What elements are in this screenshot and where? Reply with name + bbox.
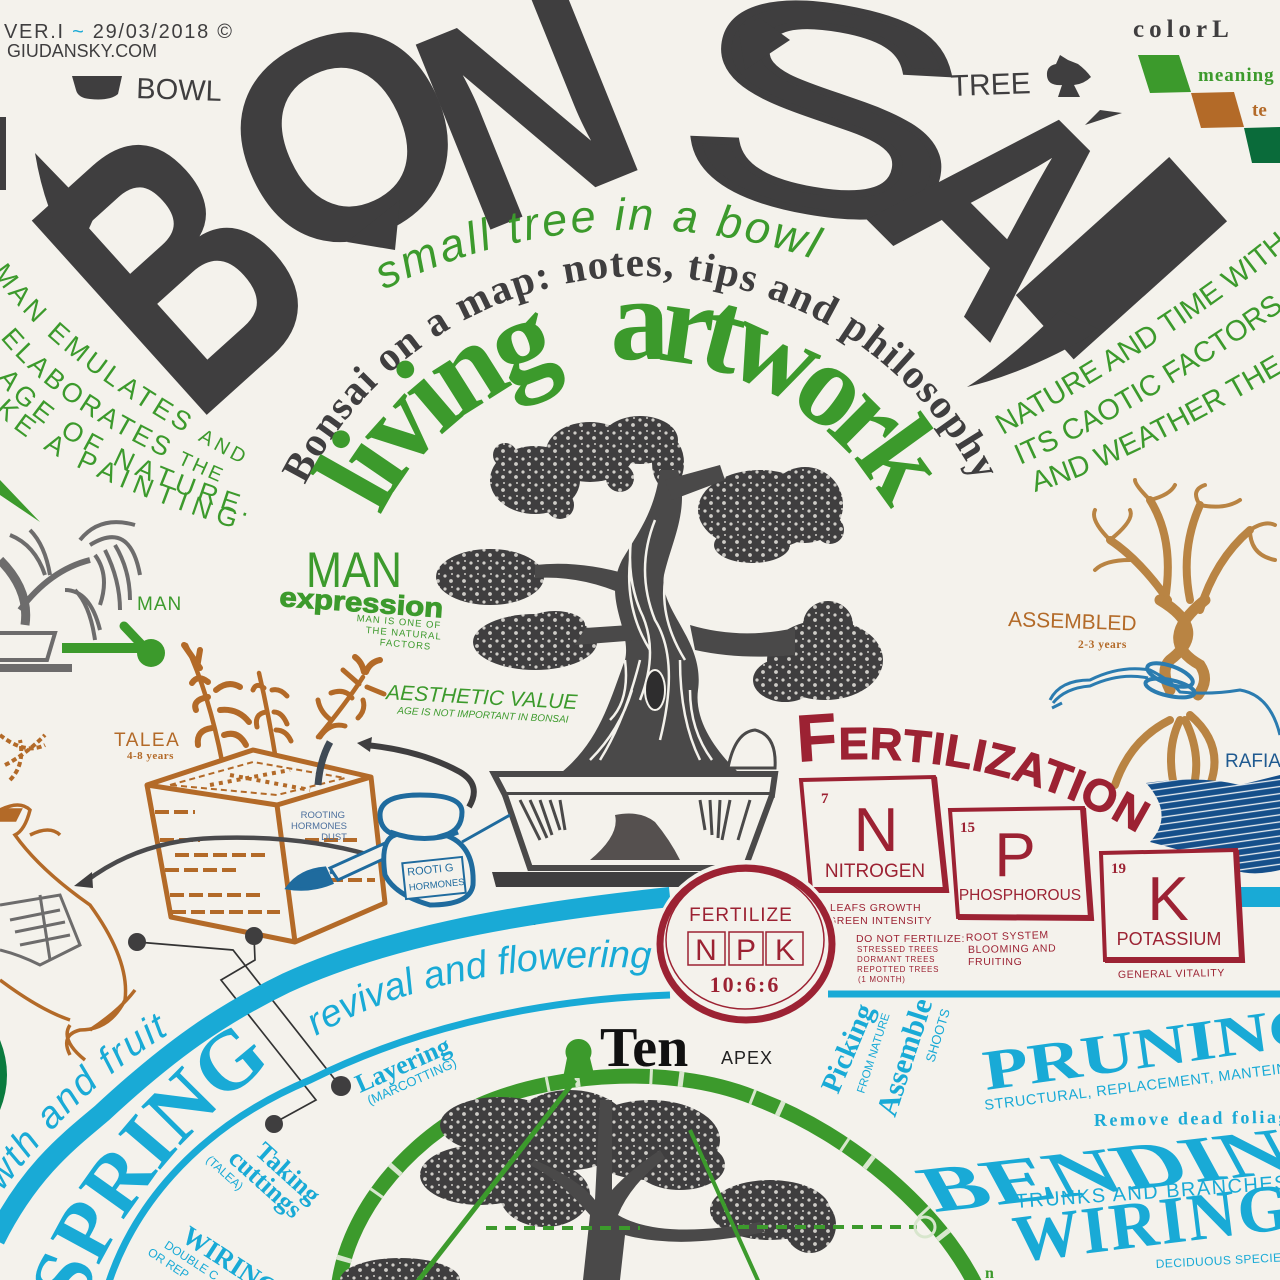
NPK tiles [801, 777, 1242, 960]
fertilize stamp: 10:6:6 [710, 972, 780, 997]
tile: potassium: POTASSIUM [1117, 929, 1221, 949]
color legend: meaning [1198, 65, 1275, 86]
icon: tree [1047, 55, 1091, 97]
green guide lines [415, 1080, 935, 1280]
hand text: revival and flowering: revival and flowering [310, 940, 652, 1036]
tile: nitrogen: NITROGEN [825, 861, 925, 882]
technique: layering: Layering [351, 1031, 455, 1098]
fertilization heading: FERTILIZATION [798, 713, 1151, 832]
connector lines [128, 919, 537, 1133]
text: aesthetic value: AESTHETIC VALUE [384, 681, 579, 714]
inner green ring [338, 1076, 978, 1280]
main bonsai tree [436, 416, 883, 887]
version note: GIUDANSKY.COM [7, 41, 157, 61]
tile: potassium [1101, 850, 1242, 960]
text: man expression: THE NATURAL [365, 625, 442, 643]
green edge tick [0, 480, 40, 522]
fertilizer notes: FRUITING [968, 956, 1022, 968]
trunk [562, 470, 738, 772]
inner foliage [340, 1090, 836, 1280]
green pin marker [62, 626, 165, 667]
left bag of roots [0, 735, 135, 1060]
raffia tie [1050, 658, 1280, 735]
fertilizer notes: DORMANT TREES [857, 955, 935, 964]
technique: pruning [979, 992, 1280, 1130]
color legend [1133, 16, 1280, 163]
assembled tree [1094, 480, 1275, 790]
fertilize stamp: N [695, 934, 717, 967]
arrow: hormones to cutting [365, 745, 474, 807]
pot [492, 730, 775, 887]
technique: picking: Assemble [870, 994, 939, 1120]
fertilizer notes: BLOOMING AND [968, 942, 1056, 956]
arrowhead: bag [74, 872, 93, 888]
fertilize stamp: FERTILIZE [689, 905, 793, 926]
technique: taking cuttings: (TALEA) [203, 1153, 246, 1193]
tile: nitrogen: N [854, 796, 898, 865]
technique: picking: Picking [815, 999, 881, 1098]
technique: picking: FROM NATURE [855, 1012, 893, 1095]
talea cutting plants [184, 645, 384, 783]
fertilizer notes: REPOTTED TREES [857, 965, 939, 974]
text: man expression: MAN IS ONE OF [356, 613, 442, 632]
rooting hormones jar: ROOTI G [407, 862, 454, 879]
version note: VER.I ~ 29/03/2018 © [4, 21, 232, 43]
tile: potassium: 19 [1111, 861, 1126, 877]
technique: bending: BENDING [905, 1107, 1280, 1226]
ring top pin [563, 1039, 595, 1078]
green edge marks [0, 1040, 7, 1110]
technique: layering: (MARCOTTING) [365, 1055, 459, 1108]
technique: pruning: PRUNING [979, 992, 1280, 1103]
inner tree [340, 1090, 836, 1280]
book in bag [0, 895, 80, 965]
text: man expression: expression [279, 582, 444, 623]
technique: taking cuttings [203, 1116, 326, 1235]
brush [287, 815, 510, 889]
label: talea: 4-8 years [127, 750, 174, 762]
label: assembled: ASSEMBLED [1008, 608, 1137, 635]
technique: picking: SHOOTS [923, 1007, 953, 1064]
arc heading: living artwork: living artwork [310, 304, 934, 514]
fertilizer notes: DO NOT FERTILIZE: [856, 933, 965, 945]
small gray tree, top left [0, 522, 140, 668]
text: aesthetic value: AGE IS NOT IMPORTANT IN BONSAI [396, 706, 569, 726]
text: man expression: MAN [306, 542, 402, 598]
color legend: colorL [1133, 16, 1234, 43]
label: rooting dust: HORMONES [291, 821, 347, 832]
tile: potassium: K [1147, 865, 1189, 934]
fertilize stamp: P [736, 934, 756, 967]
fertilize stamp [654, 860, 838, 1028]
text: man expression: FACTORS [379, 637, 432, 653]
label: apex: APEX [721, 1048, 773, 1068]
jar [380, 795, 473, 905]
rooting hormones jar: HORMONES [408, 877, 465, 894]
fertilizer notes: (1 MONTH) [858, 975, 906, 984]
label: bowl: BOWL [136, 73, 222, 108]
text: man expression [279, 542, 444, 654]
tile: nitrogen: 7 [821, 791, 829, 807]
tile: phosphorous: 15 [960, 820, 975, 836]
label: tree: TREE [950, 67, 1031, 103]
fertilizer notes: ROOT SYSTEM [966, 929, 1049, 944]
label: rooting dust: DUST [321, 832, 347, 843]
label: talea [114, 730, 180, 762]
text: man emulates nature: AGE OF NATURE. [0, 372, 246, 516]
title: BON SAI brush letters: A [817, 24, 1186, 393]
tile: nitrogen [801, 777, 946, 890]
talea box [147, 750, 385, 942]
arrow: jar to bag [85, 838, 370, 882]
branches [535, 465, 795, 657]
tile: phosphorous: PHOSPHOROUS [959, 887, 1081, 904]
fertilizer notes: STRESSED TREES [857, 945, 939, 954]
color legend: te [1252, 100, 1267, 121]
arrowhead: hormones [357, 737, 372, 752]
icon: bowl [72, 76, 122, 99]
arc heading: small tree in a bowl: small tree in a bowl [378, 197, 825, 288]
rooting hormones jar [287, 795, 510, 905]
label: rooting dust [291, 810, 347, 843]
label: Ten: Ten [600, 1017, 688, 1079]
label: rafia: RAFIA [1225, 751, 1280, 772]
tile: phosphorous: P [994, 821, 1036, 890]
inner trunk [530, 1100, 765, 1280]
fertilizer notes: GREEN INTENSITY [828, 915, 932, 927]
foliage clusters [436, 416, 883, 702]
trunk grain [590, 500, 712, 760]
small green label: man: MAN [137, 594, 182, 615]
tile: phosphorous [950, 808, 1091, 918]
technique: wiring small [145, 1209, 284, 1280]
arc heading: Bonsai on a map: Bonsai on a map: notes, tips and philosophy [282, 254, 994, 484]
title: BON SAI brush letters [0, 0, 1280, 486]
text: man emulates nature: ELABORATES THE [2, 328, 224, 482]
label: assembled: 2-3 years [1078, 639, 1127, 651]
label: rooting dust: ROOTING [301, 810, 345, 821]
technique: taking cuttings: Taking [250, 1136, 326, 1209]
fertilize stamp: K [775, 934, 795, 967]
label: talea: TALEA [114, 730, 180, 751]
version note [4, 21, 232, 61]
technique: picking [815, 994, 953, 1120]
label: assembled [1008, 608, 1137, 651]
technique: taking cuttings: cuttings [223, 1143, 308, 1224]
tree label [950, 55, 1091, 103]
fertilizer notes [828, 902, 1225, 984]
fertilizer notes: LEAFS GROWTH [830, 902, 921, 914]
fertilizer notes: GENERAL VITALITY [1118, 967, 1225, 981]
raffia bundle [1146, 775, 1280, 873]
blue ring, outer band [0, 897, 1280, 1280]
arrow: dust [318, 742, 330, 785]
